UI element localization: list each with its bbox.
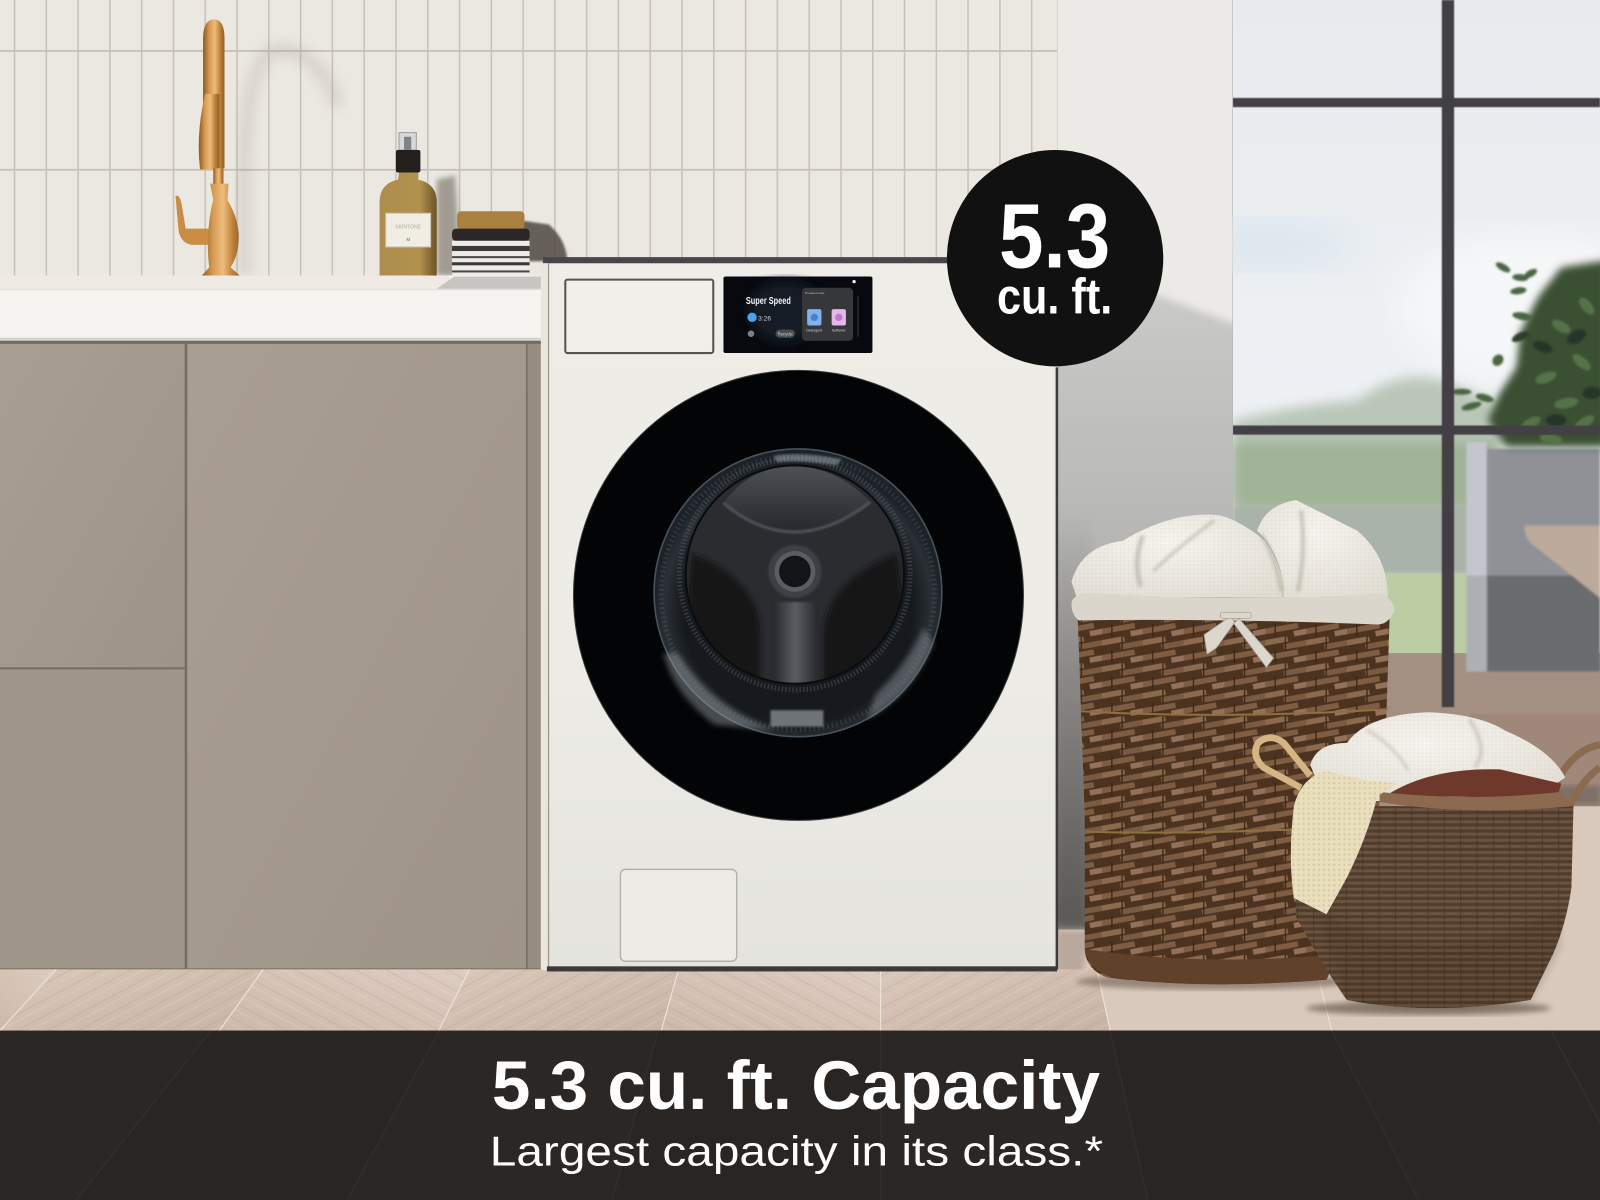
subheading: Largest capacity in its class.* (490, 1127, 1103, 1174)
white towels (1071, 500, 1388, 597)
plant foliage (1451, 260, 1600, 447)
capacity badge: cu. ft. (997, 268, 1112, 324)
basket rim (1380, 792, 1573, 810)
window view outside (1232, 0, 1600, 806)
room floor (1057, 786, 1600, 1031)
door (573, 370, 1023, 820)
cabinet drawer lower (0, 669, 185, 968)
filter access panel (620, 869, 737, 961)
left handle (1256, 738, 1310, 788)
bottle label: M (406, 237, 410, 242)
window frame (1233, 0, 1600, 707)
touch display: 3:26 (758, 315, 771, 322)
bottle label: SKINTONE (395, 225, 422, 231)
tile wall (0, 0, 1057, 281)
bottom caption band (0, 1031, 1600, 1200)
planter and table (1466, 442, 1600, 671)
touch display: Super Speed (746, 296, 791, 307)
large wicker hamper (1071, 500, 1394, 990)
small woven basket (1256, 712, 1600, 1015)
touch display: Prepared care (805, 291, 825, 295)
door glass and drum (654, 449, 942, 737)
herringbone floor (0, 969, 1332, 1031)
cream knit throw (1291, 770, 1398, 914)
hamper liner (1071, 593, 1394, 624)
touch display (723, 277, 872, 353)
wall shadow (1057, 292, 1233, 930)
capacity badge: 5.3 (999, 185, 1110, 287)
basket towels (1310, 712, 1565, 801)
faucet (176, 19, 241, 277)
striped jar (452, 211, 530, 276)
touch display: Recycle (778, 332, 793, 337)
touch display: Detergent (806, 329, 822, 333)
headline: 5.3 cu. ft. Capacity (492, 1048, 1100, 1124)
right handle (1546, 745, 1600, 806)
detergent drawer (565, 280, 713, 353)
cabinet drawer upper (0, 344, 185, 667)
back wall (1057, 0, 1233, 930)
bottle label (386, 213, 431, 247)
capacity badge (947, 150, 1163, 366)
cabinets (0, 341, 543, 970)
soap bottle (380, 133, 437, 276)
touch display: Softener (832, 329, 846, 333)
brown cloth (1386, 769, 1561, 798)
cabinet door (187, 344, 526, 968)
drawstring bow (1204, 612, 1273, 667)
countertop (0, 276, 543, 341)
washer (541, 257, 1058, 971)
